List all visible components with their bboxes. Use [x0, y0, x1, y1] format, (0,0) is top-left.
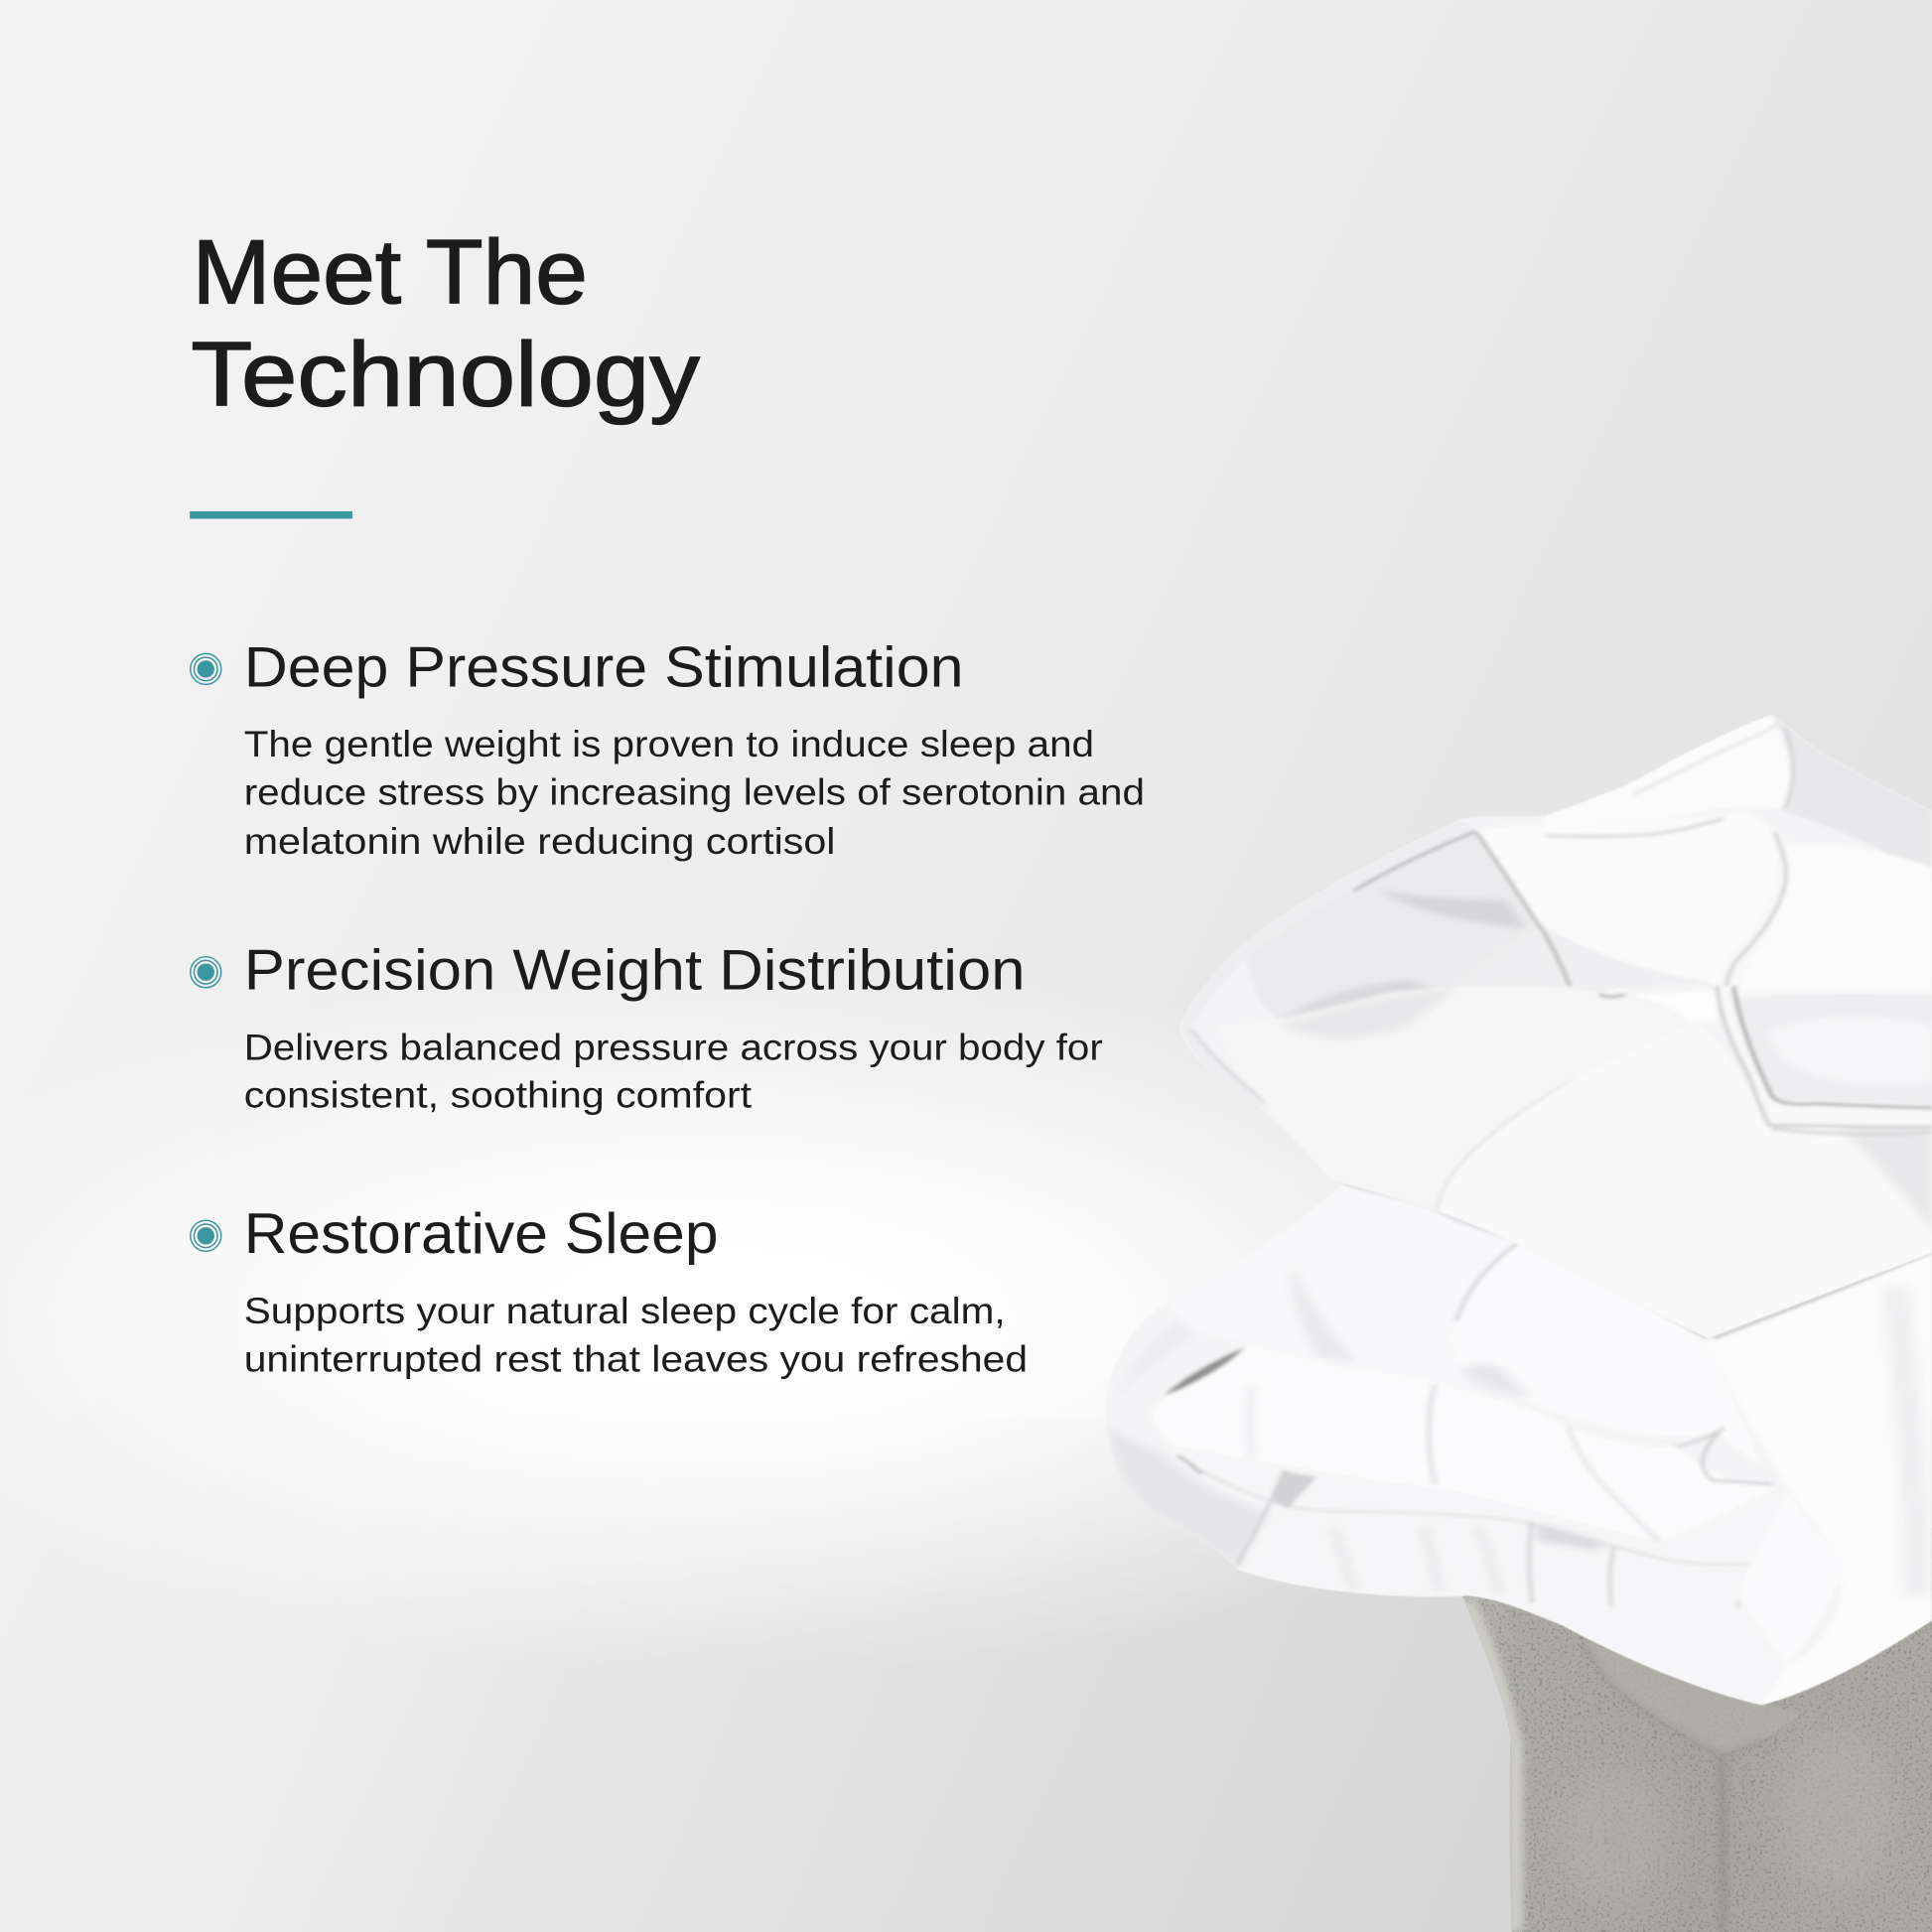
- description: melatonin while reducing cortisol: [244, 820, 835, 862]
- lower left pad: [1282, 990, 1420, 1022]
- white main panel: [1476, 811, 1778, 993]
- icon: teal target bullet: [191, 957, 221, 988]
- icon: teal target bullet: [191, 653, 221, 684]
- title: Meet The: [193, 221, 588, 323]
- description: [244, 723, 1145, 862]
- feature: Precision Weight Distribution: [191, 939, 1103, 1116]
- description: [244, 1026, 1103, 1116]
- concrete speckle texture: [1453, 1516, 1932, 1932]
- feature: Deep Pressure Stimulation: [191, 635, 1145, 862]
- description: Supports your natural sleep cycle for calm,: [244, 1290, 1006, 1331]
- rear grey panel: [1780, 722, 1932, 865]
- top roll pad: [1167, 1182, 1520, 1392]
- heading: Restorative Sleep: [244, 1202, 719, 1266]
- rear white flap: [1546, 715, 1789, 827]
- description: [244, 1290, 1028, 1379]
- heading: Deep Pressure Stimulation: [244, 635, 964, 699]
- blanket upper fold: [1179, 715, 1932, 1338]
- bottom pleated layer: [1157, 1445, 1788, 1705]
- top corner flap: [1718, 811, 1932, 1127]
- description: consistent, soothing comfort: [244, 1074, 753, 1116]
- icon: teal target bullet: [191, 1220, 221, 1251]
- feature: Restorative Sleep: [191, 1202, 1028, 1379]
- teal divider: [190, 511, 352, 518]
- center lower pad: [1437, 1080, 1577, 1211]
- fold shadow seam: [1342, 1183, 1497, 1235]
- title: [191, 221, 700, 425]
- concrete groove and collar: [1466, 1601, 1897, 1932]
- pale outer margin: [1181, 820, 1476, 1109]
- inner roll: [1151, 1345, 1778, 1541]
- blanket lower roll: [1110, 1183, 1932, 1706]
- photo: folded white weighted blanket: [1110, 715, 1932, 1706]
- description: Delivers balanced pressure across your body for: [244, 1026, 1103, 1067]
- roll gap shadow: [1164, 1347, 1244, 1395]
- title: Technology: [191, 324, 700, 425]
- description: The gentle weight is proven to induce sleep and: [244, 723, 1094, 764]
- right white panel: [1870, 1276, 1886, 1282]
- description: reduce stress by increasing levels of serotonin and: [244, 770, 1145, 812]
- shaded left panel: [1251, 837, 1531, 1015]
- right roll pad: [1450, 1243, 1761, 1466]
- heading: Precision Weight Distribution: [244, 939, 1026, 1003]
- description: uninterrupted rest that leaves you refreshed: [244, 1337, 1028, 1379]
- photo: concrete pedestal: [1453, 1516, 1932, 1932]
